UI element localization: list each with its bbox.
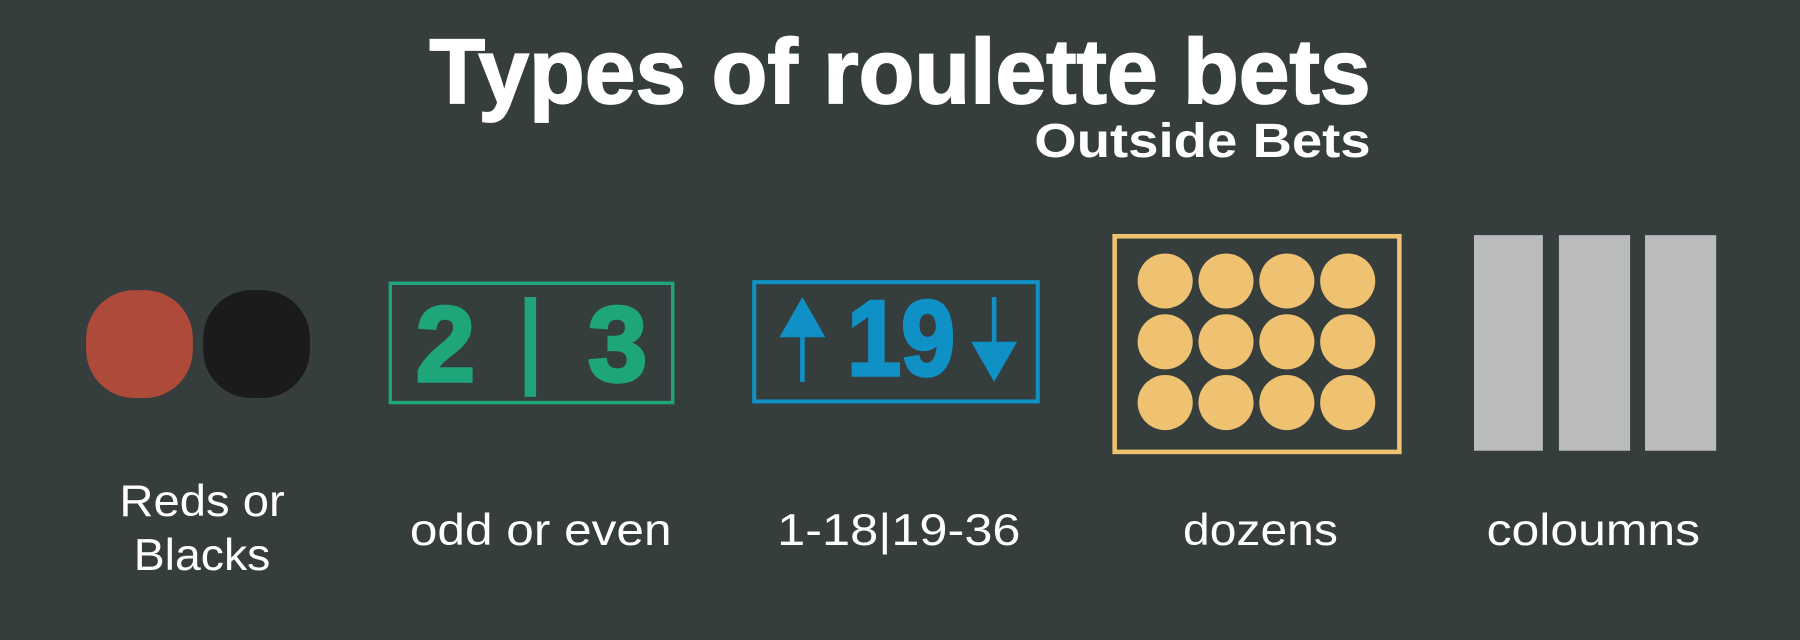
icon: odd even box: 2 — [416, 284, 475, 404]
icon: odd even box — [390, 283, 673, 404]
panel: columns — [1474, 235, 1716, 555]
icon: high low box — [754, 278, 1038, 401]
panel: odd or even — [390, 283, 673, 555]
panel: 1-18 19-36 — [754, 278, 1038, 555]
icon: columns — [1474, 235, 1716, 451]
subtitle: Outside Bets — [1034, 114, 1371, 168]
label: reds or blacks: Reds or — [119, 476, 285, 526]
label: reds or blacks: Blacks — [134, 530, 270, 580]
label: odd or even: odd or even — [410, 505, 672, 555]
icon: red chip — [86, 290, 193, 398]
label: 1-18|19-36: 1-18|19-36 — [777, 505, 1021, 555]
label: dozens: dozens — [1183, 505, 1338, 555]
title: Types of roulette bets — [429, 21, 1371, 123]
icon: dozens grid — [1115, 236, 1399, 452]
panel: reds or blacks — [86, 290, 310, 580]
label: coloumns: coloumns — [1487, 505, 1700, 555]
icon: high low box: 19 — [847, 278, 955, 398]
icon: black chip — [203, 290, 310, 398]
panel: dozens — [1115, 236, 1399, 555]
icon: odd even box: 3 — [588, 284, 647, 404]
